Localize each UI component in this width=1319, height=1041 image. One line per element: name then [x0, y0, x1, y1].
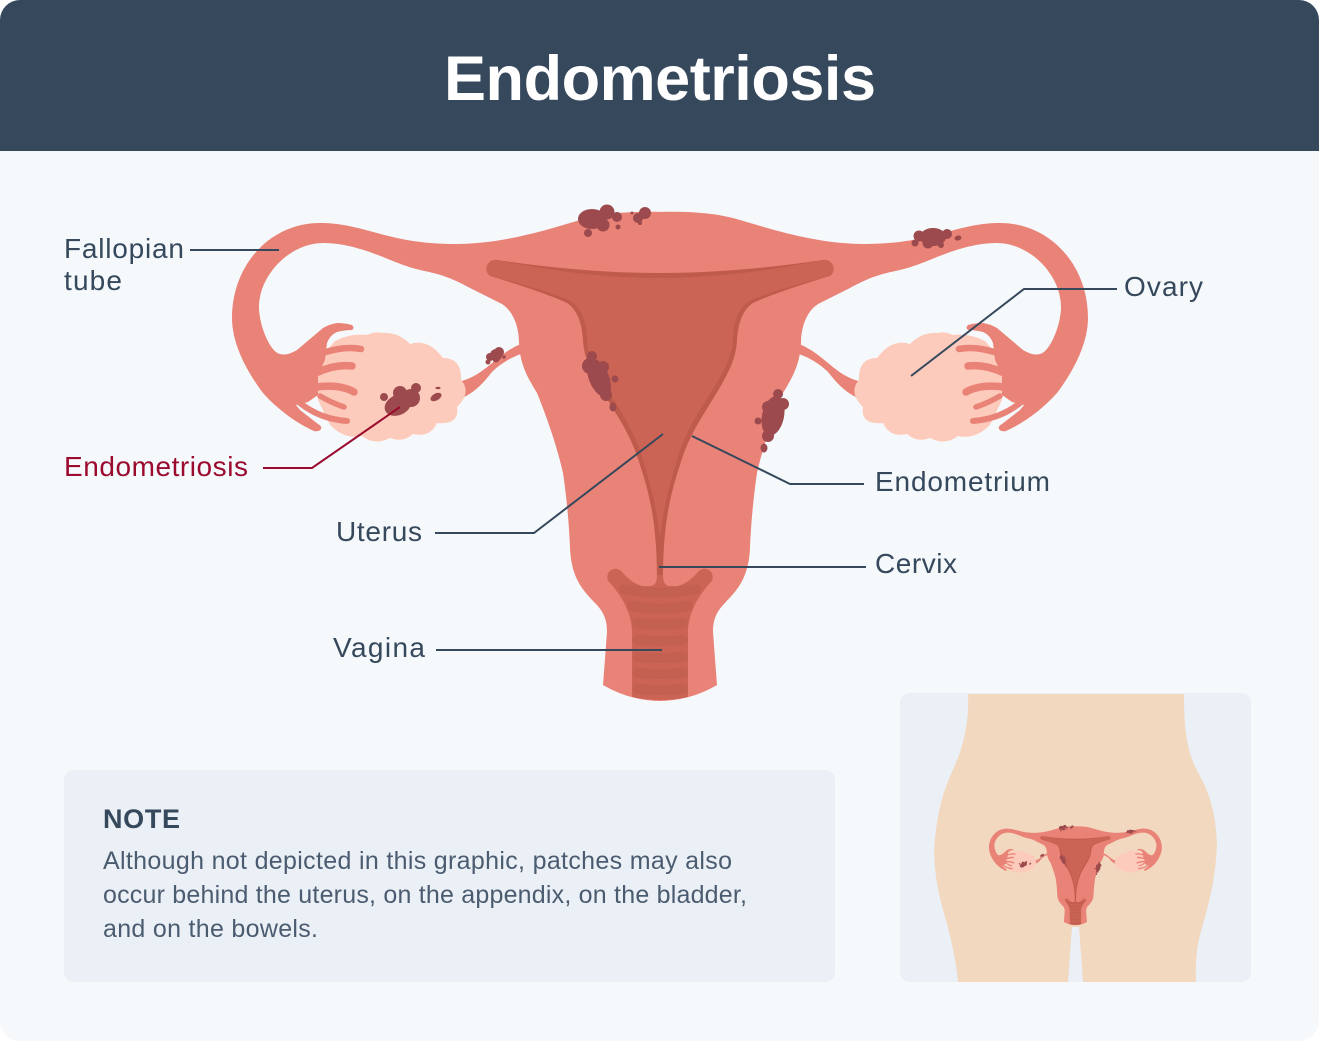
uterine cavity [486, 260, 834, 540]
label: uterus: Uterus [336, 516, 422, 547]
title: Endometriosis [444, 44, 876, 114]
vaginal ribs [624, 589, 696, 690]
left side: tube, ligament, ovary, uterine wall [232, 212, 662, 701]
right side: mirrored tube, ligament, ovary, uterine wall [658, 212, 1088, 701]
label: cervix: Cervix [875, 548, 957, 579]
label: uterus [336, 434, 663, 547]
anatomy diagram [232, 204, 1088, 701]
label: fallopian tube [64, 233, 279, 296]
endometrium edge [486, 260, 834, 580]
label: vagina: Vagina [333, 632, 425, 663]
inset: small anatomy diagram [989, 825, 1162, 925]
label: fallopian tube: Fallopian [64, 233, 184, 264]
label: endometrium [692, 436, 1050, 497]
label: fallopian tube: tube [64, 265, 122, 296]
inset: body silhouette [934, 694, 1217, 982]
label: endometriosis: Endometriosis [64, 451, 248, 482]
label: endometriosis [64, 407, 400, 482]
inset: body location panel [900, 693, 1251, 982]
label: ovary [911, 271, 1203, 376]
note body [103, 847, 747, 943]
note body: and on the bowels. [103, 915, 318, 943]
endometriosis patches [380, 204, 962, 452]
header band [0, 0, 1319, 151]
note panel [64, 770, 835, 982]
note heading: NOTE [103, 804, 180, 834]
note body: Although not depicted in this graphic, patches may also [103, 847, 732, 875]
label: endometrium: Endometrium [875, 466, 1050, 497]
label: ovary: Ovary [1124, 271, 1203, 302]
vagina canal [607, 569, 713, 700]
note body: occur behind the uterus, on the appendix, on the bladder, [103, 881, 747, 909]
